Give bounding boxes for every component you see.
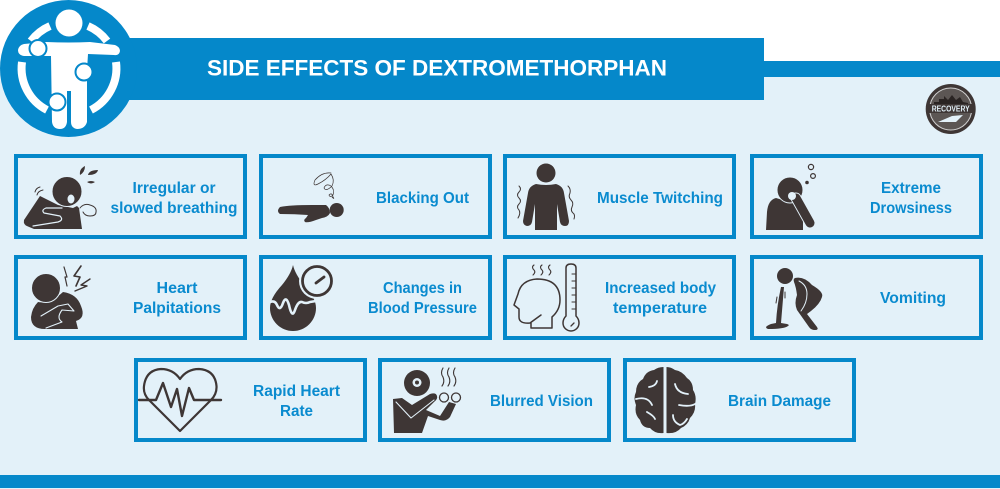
icon: person vomiting bbox=[766, 268, 822, 330]
bottom band bbox=[0, 475, 1000, 488]
icon: drowsy person bbox=[766, 164, 815, 230]
icon: blood drop and gauge bbox=[270, 263, 335, 331]
card: extreme drowsiness: Drowsiness bbox=[870, 200, 952, 217]
label: Rapid Heart bbox=[253, 383, 341, 400]
icon: collapsed person bbox=[278, 173, 344, 222]
icon: person breathing heavily bbox=[24, 166, 98, 229]
label: Blacking Out bbox=[376, 190, 470, 207]
card: heart palpitations bbox=[16, 257, 245, 338]
card: increased body temperature bbox=[505, 257, 734, 338]
icon: person clutching chest bbox=[31, 266, 90, 329]
title banner bbox=[120, 38, 764, 100]
card: brain damage bbox=[625, 360, 854, 440]
card: blurred vision bbox=[380, 360, 609, 440]
label: Blurred Vision bbox=[490, 393, 593, 410]
logo badge bbox=[926, 84, 976, 134]
card: irregular or slowed breathing: slowed breathing bbox=[110, 200, 238, 217]
card: muscle twitching bbox=[505, 156, 734, 237]
icon: brain bbox=[634, 367, 696, 433]
label: Heart bbox=[156, 280, 198, 297]
icon: twitching body bbox=[518, 164, 574, 230]
label: Extreme bbox=[881, 180, 941, 197]
card: extreme drowsiness bbox=[752, 156, 981, 237]
icon: person with binoculars bbox=[393, 368, 460, 433]
card: changes in blood pressure bbox=[261, 257, 490, 338]
card: vomiting bbox=[752, 257, 981, 338]
card: heart palpitations: Palpitations bbox=[133, 300, 221, 317]
icon: head and thermometer bbox=[514, 264, 579, 331]
label: Brain Damage bbox=[728, 393, 831, 410]
card: rapid heart rate: Rate bbox=[280, 403, 313, 420]
logo badge: RECOVERY bbox=[932, 104, 970, 114]
label: Muscle Twitching bbox=[597, 190, 723, 207]
card: increased body temperature: temperature bbox=[613, 300, 707, 317]
card: rapid heart rate bbox=[136, 360, 365, 440]
label: Increased body bbox=[605, 280, 716, 297]
icon: heart with pulse line bbox=[139, 369, 221, 431]
title: SIDE EFFECTS OF DEXTROMETHORPHAN bbox=[207, 56, 667, 80]
label: Vomiting bbox=[880, 290, 946, 307]
label: Irregular or bbox=[132, 180, 216, 197]
label: Changes in bbox=[383, 280, 462, 297]
card: blacking out bbox=[261, 156, 490, 237]
card: irregular or slowed breathing bbox=[16, 156, 245, 237]
card: changes in blood pressure: Blood Pressure bbox=[368, 300, 477, 317]
right header band bbox=[760, 61, 1000, 77]
icon: body with highlighted joints bbox=[0, 0, 137, 137]
